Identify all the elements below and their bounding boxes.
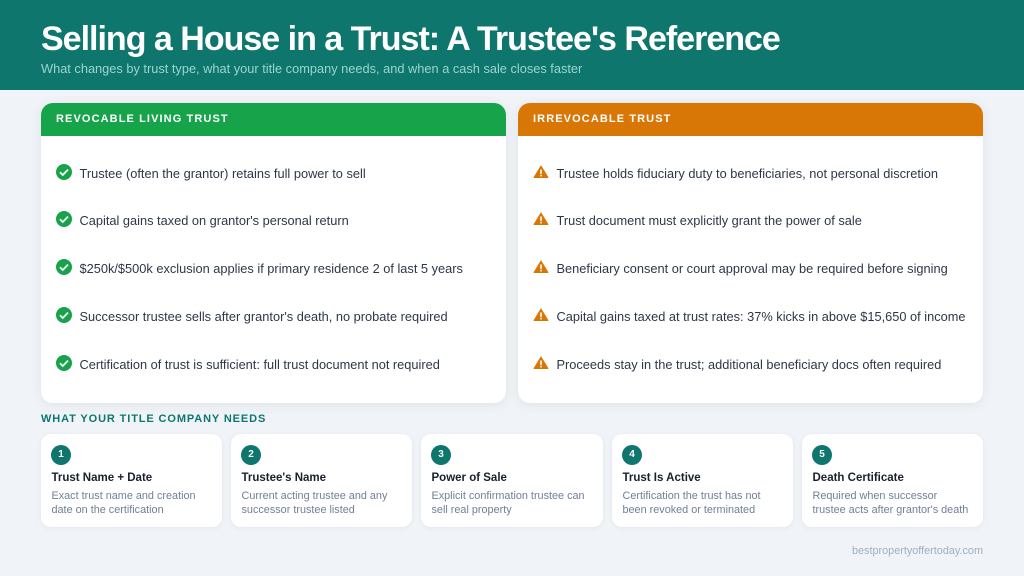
item: consent: Beneficiary consent or court approval may be required before signing: [556, 261, 948, 276]
card 1: trust name and date: date on the certification: [52, 504, 164, 516]
item: power to sell: Trustee (often the grantor) retains full power to sell: [80, 166, 366, 181]
card 4: trust is active: Certification the trust has not: [622, 490, 761, 502]
card 1: trust name and date: Exact trust name and creation: [52, 490, 196, 502]
panel heading: irrevocable: [518, 103, 983, 136]
item: capital gains: Capital gains taxed on grantor's personal return: [80, 213, 349, 228]
item: proceeds: Proceeds stay in the trust; additional beneficiary docs often required: [556, 357, 941, 372]
card 1: trust name and date: [41, 434, 222, 527]
item: fiduciary duty: Trustee holds fiduciary duty to beneficiaries, not personal discretion: [556, 166, 938, 181]
card 1: trust name and date: 1: [58, 449, 64, 460]
card 3: power of sale: 3: [438, 449, 444, 460]
item: exclusion: $250k/$500k exclusion applies if primary residence 2 of last 5 years: [80, 261, 463, 276]
card 3: power of sale: sell real property: [432, 504, 512, 516]
card 2: trustee's name: successor trustee listed: [242, 504, 355, 516]
panel heading: irrevocable: IRREVOCABLE TRUST: [533, 113, 671, 125]
card 3: power of sale: [421, 434, 603, 527]
card 5: death certificate: [802, 434, 983, 527]
panel: revocable living trust: [41, 103, 506, 403]
card 1: trust name and date: Trust Name + Date: [52, 472, 152, 484]
card 5: death certificate: Required when successor: [812, 490, 937, 502]
panel heading: revocable: [41, 103, 506, 136]
panel heading: revocable: REVOCABLE LIVING TRUST: [56, 113, 229, 125]
card 5: death certificate: trustee acts after grantor's death: [812, 504, 968, 516]
card 2: trustee's name: Trustee's Name: [242, 472, 326, 484]
section heading: title company needs: WHAT YOUR TITLE COMPANY NEEDS: [41, 413, 266, 425]
header banner: [0, 0, 1024, 90]
card 3: power of sale: Explicit confirmation trustee can: [432, 490, 585, 502]
card 4: trust is active: [612, 434, 793, 527]
card 3: power of sale: Power of Sale: [432, 472, 507, 484]
card 5: death certificate: Death Certificate: [812, 472, 904, 484]
title: Selling a House in a Trust: A Trustee's Reference: [41, 20, 780, 58]
item: successor trustee: Successor trustee sells after grantor's death, no probate required: [80, 309, 448, 324]
item: power of sale: Trust document must explicitly grant the power of sale: [556, 213, 862, 228]
source footer: bestpropertyoffertoday.com: [852, 544, 983, 556]
card 2: trustee's name: [231, 434, 412, 527]
panel: irrevocable trust: [518, 103, 983, 403]
card 5: death certificate: 5: [819, 449, 825, 460]
item: trust rates: Capital gains taxed at trust rates: 37% kicks in above $15,650 of income: [556, 309, 966, 324]
card 4: trust is active: Trust Is Active: [622, 472, 701, 484]
card 2: trustee's name: Current acting trustee and any: [242, 490, 387, 502]
card 4: trust is active: 4: [629, 449, 635, 460]
item: certification: Certification of trust is sufficient: full trust document not required: [80, 357, 440, 372]
card 4: trust is active: been revoked or terminated: [622, 504, 755, 516]
card 2: trustee's name: 2: [248, 449, 254, 460]
subtitle: What changes by trust type, what your title company needs, and when a cash sale closes faster: [41, 61, 582, 76]
